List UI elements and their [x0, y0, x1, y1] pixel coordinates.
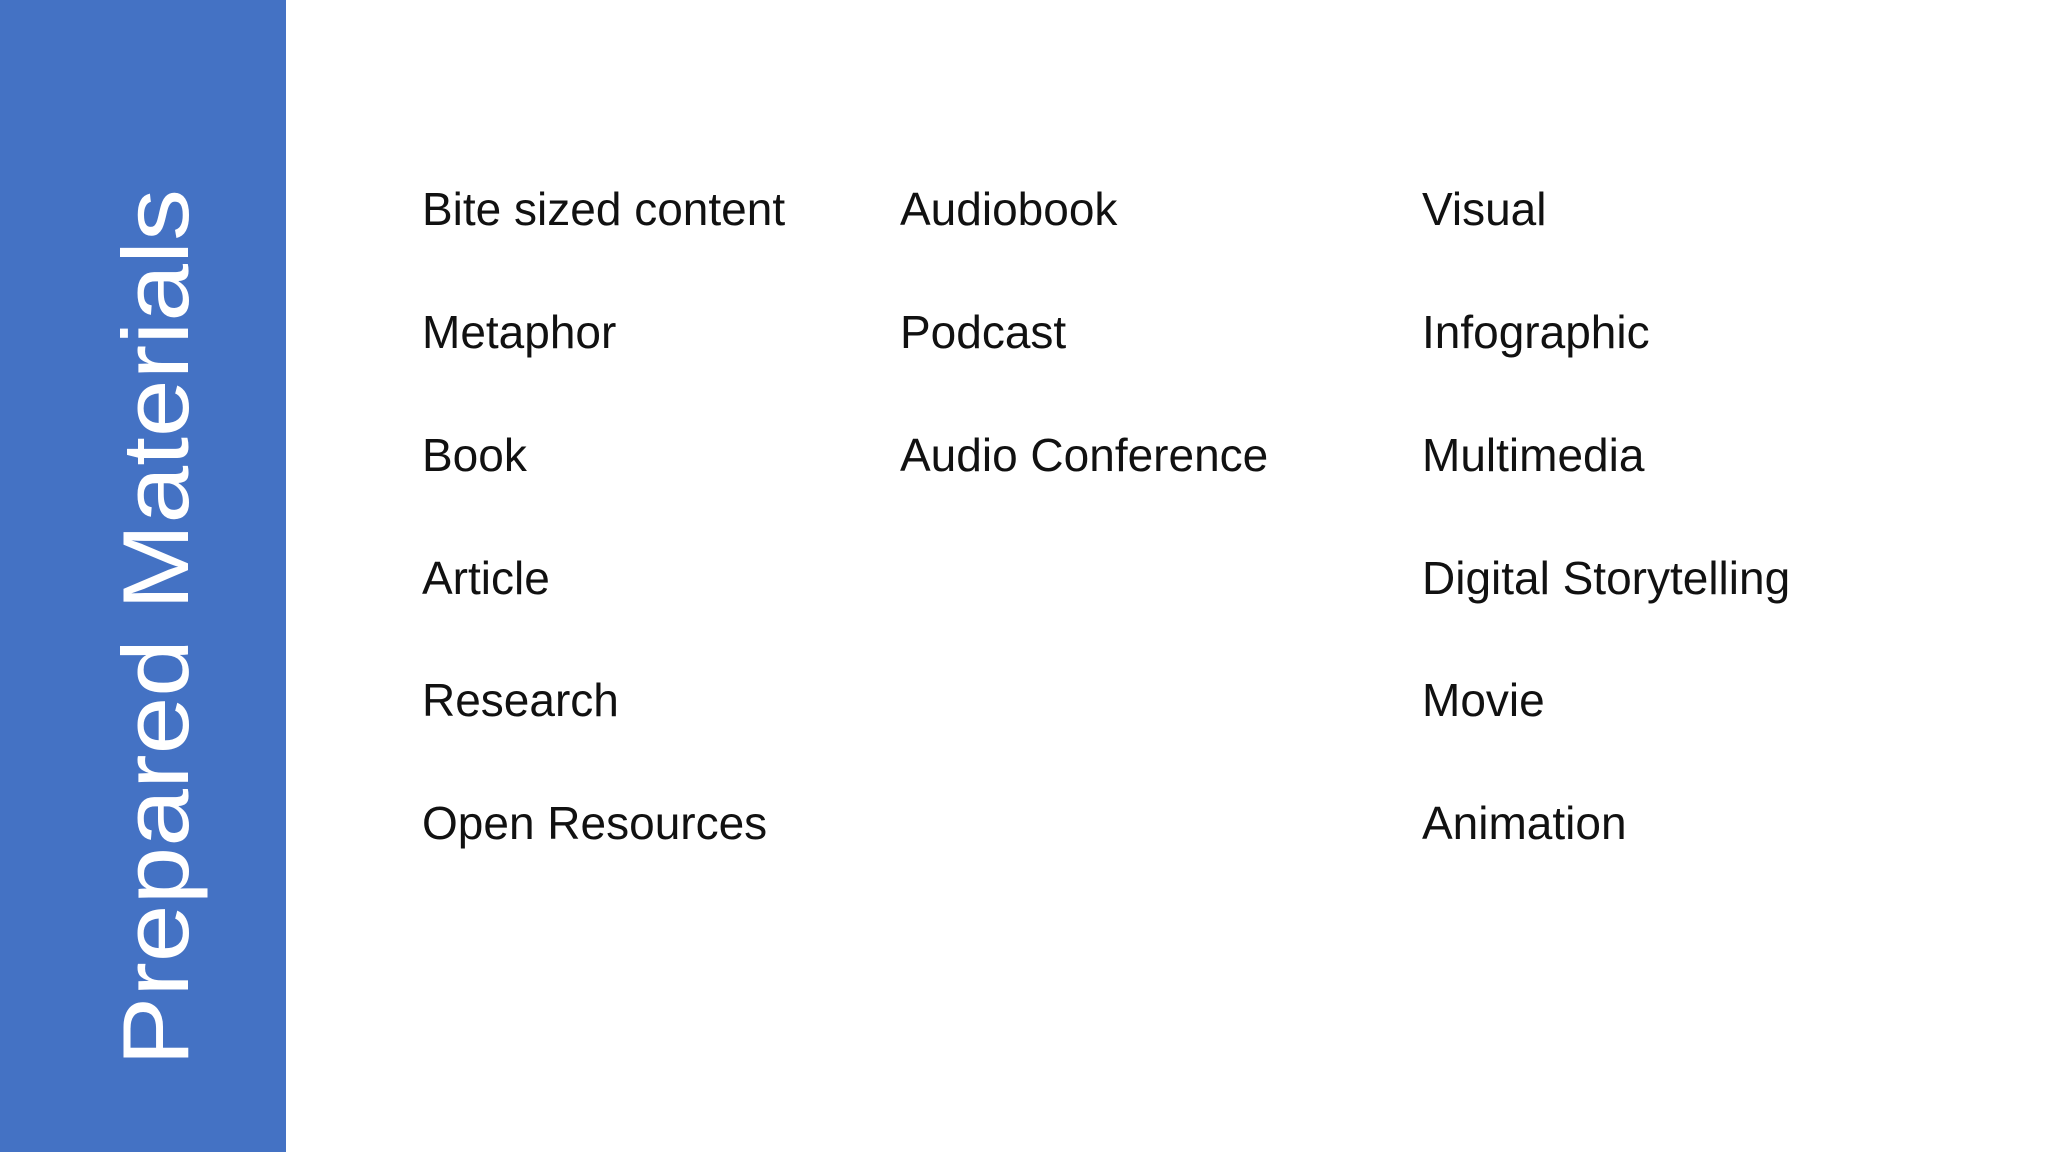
- text block: column 3: Infographic: [1422, 306, 1650, 358]
- text block: column 3: Multimedia: [1422, 429, 1644, 481]
- text block: column 3: [1422, 183, 1790, 849]
- text block: column 1: [422, 183, 785, 849]
- panel: blue sidebar with vertical title: [0, 0, 286, 1152]
- text block: column 1: Metaphor: [422, 306, 616, 358]
- text block: column 1: Research: [422, 674, 619, 726]
- text block: column 2: Podcast: [900, 306, 1066, 358]
- text block: column 1: Bite sized content: [422, 183, 785, 235]
- text block: column 3: Movie: [1422, 674, 1545, 726]
- text block: column 2: Audiobook: [900, 183, 1117, 235]
- text block: column 1: Article: [422, 552, 550, 604]
- text block: column 3: Visual: [1422, 183, 1546, 235]
- text block: column 3: Animation: [1422, 797, 1627, 849]
- text block: column 1: Open Resources: [422, 797, 767, 849]
- text block: column 2: [900, 183, 1268, 481]
- text block: column 2: Audio Conference: [900, 429, 1268, 481]
- text block: column 3: Digital Storytelling: [1422, 552, 1790, 604]
- title: Prepared Materials: Prepared Materials: [103, 189, 208, 1066]
- text block: column 1: Book: [422, 429, 527, 481]
